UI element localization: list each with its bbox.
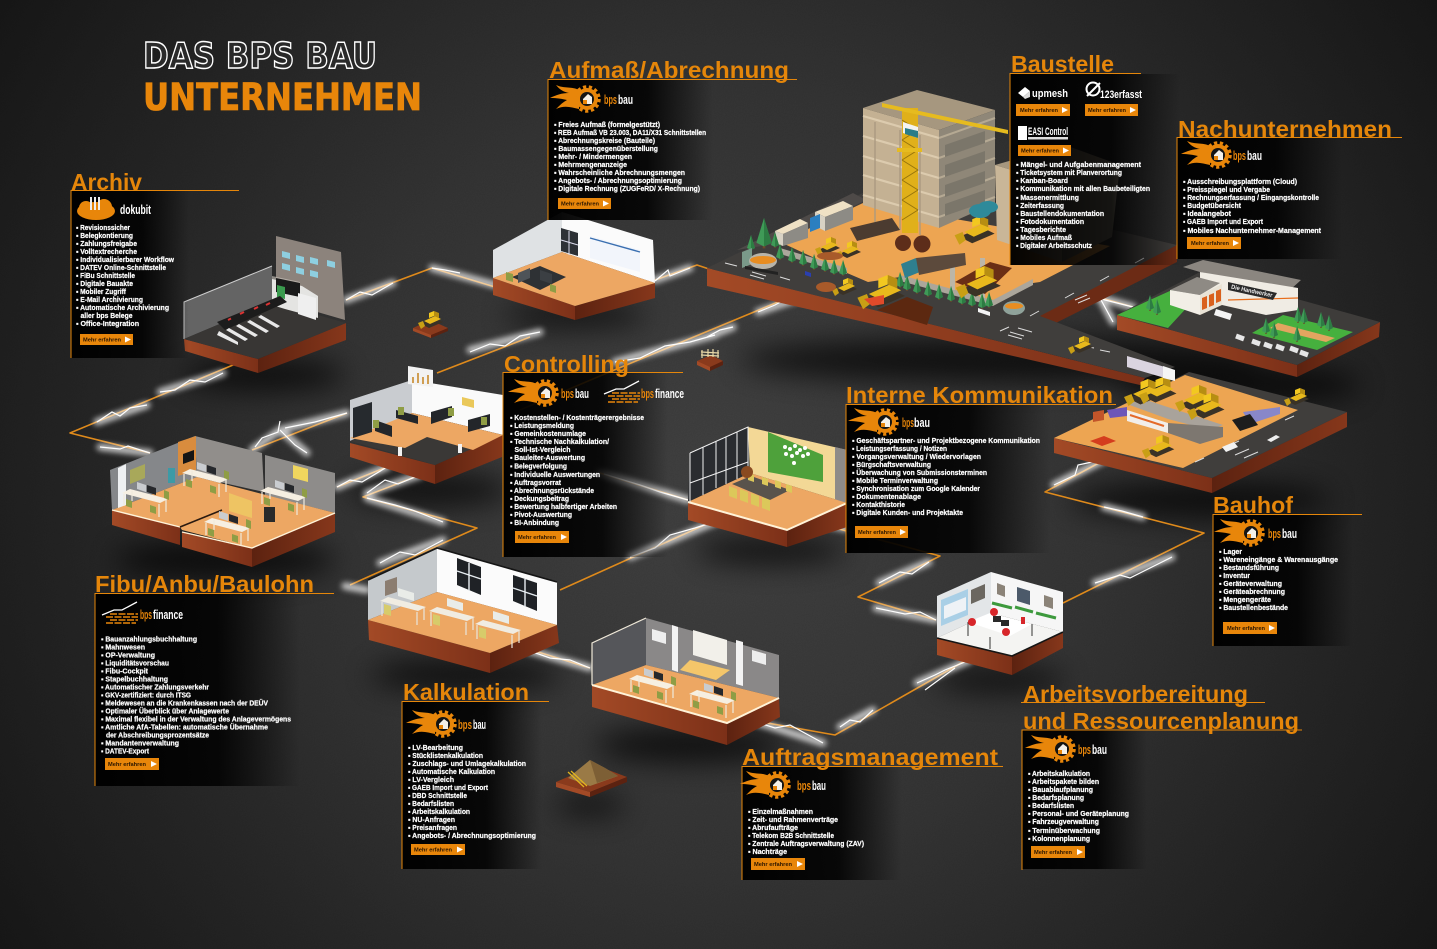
- feature list: ▪ Mobiler Zugriff: [76, 287, 127, 296]
- logo: bps finance: bps: [641, 386, 654, 401]
- floating dirt pile block: [556, 760, 627, 797]
- heading: Archiv: [71, 169, 142, 195]
- feature list: ▪ Zentrale Auftragsverwaltung (ZAV): [748, 839, 865, 848]
- logo: 123erfasst: 123erfasst: [1100, 89, 1142, 101]
- button: Mehr erfahren: [1191, 241, 1229, 247]
- feature list: ▪ BI-Anbindung: [510, 518, 559, 527]
- feature list: ▪ Mehr- / Mindermengen: [554, 152, 632, 161]
- button: [1187, 237, 1241, 249]
- feature list: ▪ Abrufaufträge: [748, 823, 798, 832]
- excavation pit: [877, 297, 933, 325]
- feature list: ▪ Massenermittlung: [1016, 193, 1079, 202]
- platform side right: [1005, 245, 1177, 342]
- button: [80, 334, 133, 345]
- feature list: ▪ Digitale Bauakte: [76, 279, 133, 288]
- yard machines: [1068, 336, 1309, 458]
- feature list: ▪ DBD Schnittstelle: [408, 791, 467, 800]
- feature list: ▪ Bürgschaftsverwaltung: [852, 460, 931, 469]
- button EASI Control: Mehr erfahren: [1021, 148, 1059, 154]
- scene: Baustelle construction site: [707, 90, 1177, 385]
- road markings: [725, 258, 1144, 352]
- feature list: ▪ Geräteabrechnung: [1219, 587, 1285, 596]
- feature list: ▪ Auftragsvorrat: [510, 478, 562, 487]
- logo: bps bau: [1181, 141, 1262, 167]
- scene: Aufmass room: [493, 212, 655, 320]
- logo: dokubit: dokubit: [120, 202, 151, 217]
- logo: EASI Control: EASI Control: [1028, 126, 1068, 138]
- connection lines: [70, 265, 1204, 735]
- feature list: [1016, 160, 1150, 250]
- feature list: ▪ Bedarfslisten: [1028, 801, 1074, 810]
- feature list: ▪ GAEB Import und Export: [1183, 217, 1264, 226]
- heading line one: Arbeitsvorbereitung: [1023, 681, 1248, 707]
- feature list: ▪ GKV-zertifiziert: durch ITSG: [101, 690, 191, 700]
- feature list: ▪ Stapelbuchhaltung: [101, 674, 168, 684]
- feature list: ▪ REB Aufmaß VB 23.003, DA11/X31 Schnittstellen: [554, 128, 706, 137]
- feature list: ▪ Tagesberichte: [1016, 225, 1066, 234]
- scene: Fibu offices: [110, 436, 335, 567]
- feature list: ▪ Wahrscheinliche Abrechnungsmengen: [554, 168, 685, 177]
- scene: Bauhof yard: [1054, 336, 1347, 493]
- scene: Auftragsmanagement room: [592, 618, 780, 745]
- feature list: ▪ Mobiles Aufmaß: [1016, 233, 1073, 242]
- logo: bps bau: [740, 771, 826, 797]
- heading: Auftragsmanagement: [742, 744, 998, 770]
- feature list: ▪ Mengengeräte: [1219, 595, 1271, 604]
- logo: bps bau: [848, 408, 930, 434]
- logo: bps finance: bps: [140, 607, 152, 622]
- feature list: Soll-Ist-Vergleich: [514, 445, 570, 454]
- feature list: ▪ Inventur: [1219, 571, 1250, 580]
- feature list: ▪ Digitale Kunden- und Projektakte: [852, 508, 963, 517]
- floating bulldozer block: [413, 311, 448, 338]
- feature list: [101, 634, 291, 756]
- button: Mehr erfahren: [858, 530, 896, 536]
- fences: [780, 248, 847, 274]
- scene: Arbeitsvorbereitung room: [937, 572, 1063, 675]
- feature list: ▪ Liquiditätsvorschau: [101, 658, 169, 668]
- feature list: ▪ Arbeitskalkulation: [408, 807, 470, 816]
- logo: bps bau: bps: [561, 386, 574, 401]
- title line two: UNTERNEHMEN: [143, 76, 422, 119]
- feature list: ▪ Preisspiegel und Vergabe: [1183, 185, 1270, 194]
- feature list: ▪ Fibu-Cockpit: [101, 666, 149, 676]
- scene: Nachunternehmer platform: [1117, 260, 1380, 377]
- trees and parked cars: [1146, 295, 1333, 355]
- logo: bps bau: bps: [1268, 526, 1281, 541]
- lightning glow: [97, 268, 1172, 743]
- heading: Bauhof: [1213, 492, 1293, 518]
- feature list: ▪ Baustellenbestände: [1219, 603, 1288, 612]
- feature list: ▪ Baustellendokumentation: [1016, 209, 1104, 218]
- panel: Baustelle: [1010, 51, 1180, 265]
- panel: Aufmass/Abrechnung: [548, 57, 797, 220]
- button: [411, 844, 465, 855]
- feature list: ▪ Abrechnungskreise (Bauteile): [554, 136, 656, 145]
- logo: bps finance: [102, 602, 183, 623]
- heading: Nachunternehmen: [1178, 116, 1392, 142]
- panel: Bauhof: [1213, 492, 1362, 646]
- feature list: ▪ Bedarfslisten: [408, 799, 454, 808]
- feature list: ▪ Mobile Terminverwaltung: [852, 476, 938, 485]
- feature list: ▪ Mahnwesen: [101, 642, 145, 652]
- panel: Archiv: [71, 169, 239, 358]
- building main: [863, 90, 995, 130]
- logo: bps bau: bps: [1233, 148, 1246, 163]
- panel: Controlling: [503, 351, 684, 557]
- feature list: ▪ Bestandsführung: [1219, 563, 1279, 572]
- feature list: [510, 413, 644, 527]
- feature list: ▪ Arbeitskalkulation: [1028, 769, 1090, 778]
- scene: Kalkulation room: [368, 548, 559, 673]
- site containers: [775, 219, 808, 234]
- heading: Controlling: [504, 351, 629, 377]
- feature list: ▪ Bedarfsplanung: [1028, 793, 1084, 802]
- feature list: ▪ E-Mail Archivierung: [76, 295, 143, 304]
- feature list: ▪ Bauanzahlungsbuchhaltung: [101, 634, 197, 644]
- feature list: ▪ Kanban-Board: [1016, 176, 1068, 185]
- heading: Fibu/Anbu/Baulohn: [95, 571, 314, 597]
- feature list: ▪ Synchronisation zum Google Kalender: [852, 484, 980, 493]
- panel: Fibu/Anbu/Baulohn: [95, 571, 334, 786]
- feature list: ▪ Volltextrecherche: [76, 247, 137, 256]
- feature list: ▪ Automatischer Zahlungsverkehr: [101, 682, 209, 692]
- back strip: [737, 193, 866, 250]
- feature list: ▪ Bewertung halbfertiger Arbeiten: [510, 502, 617, 511]
- feature list: aller bps Belege: [80, 311, 132, 320]
- feature list: ▪ Geräteverwaltung: [1219, 579, 1282, 588]
- feature list: ▪ LV-Vergleich: [408, 775, 454, 784]
- vehicles: [742, 201, 1025, 316]
- button: Mehr erfahren: [754, 862, 792, 868]
- logo: EASI Control: [1018, 126, 1068, 140]
- feature list: ▪ NU-Anfragen: [408, 815, 455, 824]
- scene: Archiv platform: [184, 236, 346, 373]
- cable drums and pipes: [895, 235, 911, 251]
- lightning bolts: [97, 268, 1172, 743]
- feature list: ▪ Leistungsmeldung: [510, 421, 574, 430]
- logo: bps bau: bps: [797, 778, 811, 793]
- feature list: ▪ Abrechnungsrückstände: [510, 486, 594, 495]
- panel: Interne Kommunikation: [846, 382, 1116, 553]
- logo: upmesh: upmesh: [1032, 88, 1068, 100]
- logo: bps bau: bau: [618, 92, 633, 107]
- feature list: ▪ Bauleiter-Auswertung: [510, 453, 585, 462]
- feature list: ▪ Mobiles Nachunternehmer-Management: [1183, 226, 1322, 235]
- button: [105, 758, 159, 770]
- feature list: ▪ Optimaler Überblick über Anlagewerte: [101, 706, 229, 716]
- button: Mehr erfahren: [518, 535, 556, 541]
- feature list: ▪ Einzelmaßnahmen: [748, 807, 813, 816]
- button: [558, 198, 611, 209]
- logo: bps bau: bau: [914, 415, 930, 430]
- heading: Interne Kommunikation: [846, 382, 1113, 408]
- feature list: der Abschreibungsprozentsätze: [106, 730, 209, 740]
- title: [143, 36, 422, 119]
- building second block: [995, 145, 1120, 185]
- feature list: ▪ Leistungserfassung / Notizen: [852, 444, 947, 453]
- feature list: ▪ Revisionssicher: [76, 223, 130, 232]
- feature list: ▪ Kostenstellen- / Kostenträgerergebnisse: [510, 413, 644, 422]
- feature list: ▪ Digitale Rechnung (ZUGFeRD/ X-Rechnung): [554, 184, 701, 193]
- button: Mehr erfahren: [1227, 626, 1265, 632]
- panel: Kalkulation: [402, 679, 549, 869]
- feature list: ▪ Digitaler Arbeitsschutz: [1016, 241, 1092, 250]
- button: Mehr erfahren: [108, 762, 146, 768]
- feature list: ▪ LV-Bearbeitung: [408, 743, 463, 752]
- logo: bps bau: bps: [1078, 742, 1091, 757]
- logo: bps bau: bps: [604, 92, 617, 107]
- heading: Aufmaß/Abrechnung: [549, 57, 789, 83]
- feature list: ▪ Wareneingänge & Warenausgänge: [1219, 555, 1338, 564]
- feature list: ▪ Ticketsystem mit Planverortung: [1016, 168, 1122, 177]
- feature list: [408, 743, 536, 840]
- panel: Arbeitsvorbereitung und Ressourcenplanung: [1021, 681, 1302, 870]
- button: Mehr erfahren: [414, 848, 452, 854]
- scene: Controlling office: [350, 366, 503, 484]
- feature list: ▪ Technische Nachkalkulation/: [510, 437, 609, 446]
- button: [515, 531, 569, 543]
- sign text: Die Handwerker: [1230, 285, 1273, 299]
- feature list: ▪ Dokumentenablage: [852, 492, 921, 501]
- button upmesh: Mehr erfahren: [1020, 108, 1058, 114]
- site ground: [780, 203, 1110, 303]
- button 123erfasst: Mehr erfahren: [1088, 108, 1126, 114]
- feature list: ▪ Stücklistenkalkulation: [408, 751, 483, 760]
- road surface: [707, 178, 1177, 378]
- button: [855, 526, 908, 538]
- feature list: ▪ Angebots- / Abrechnungsoptimierung: [408, 831, 536, 840]
- feature list: ▪ Geschäftspartner- und Projektbezogene Kommunikation: [852, 436, 1040, 445]
- feature list: ▪ Belegverfolgung: [510, 462, 567, 470]
- heading: Kalkulation: [403, 679, 529, 705]
- feature list: ▪ Telekom B2B Schnittstelle: [748, 831, 834, 840]
- feature list: [1219, 547, 1338, 612]
- feature list: [852, 436, 1040, 517]
- logo: bps bau: bps: [902, 415, 914, 430]
- logo: 123erfasst: [1086, 82, 1142, 101]
- platform drop shadows: [115, 303, 1360, 815]
- feature list: ▪ FiBu Schnittstelle: [76, 271, 135, 280]
- feature list: ▪ Gemeinkostenumlage: [510, 429, 586, 438]
- feature list: ▪ Mehrmengenanzeige: [554, 160, 627, 169]
- feature list: ▪ Zeiterfassung: [1016, 201, 1064, 210]
- feature list: ▪ Office-Integration: [76, 319, 139, 328]
- trees: [747, 218, 993, 309]
- feature list: ▪ Individuelle Auswertungen: [510, 470, 600, 479]
- feature list: ▪ Terminüberwachung: [1028, 826, 1100, 835]
- heading line two: und Ressourcenplanung: [1023, 708, 1299, 734]
- feature list: ▪ Mandantenverwaltung: [101, 738, 179, 748]
- logo: dokubit: [77, 197, 151, 220]
- logo: bps bau: bau: [575, 386, 589, 401]
- feature list: [1183, 177, 1322, 235]
- feature list: ▪ Ausschreibungsplattform (Cloud): [1183, 177, 1298, 186]
- logo: bps bau: bau: [1092, 742, 1107, 757]
- feature list: [76, 223, 174, 328]
- feature list: ▪ Zahlungsfreigabe: [76, 239, 137, 248]
- title line one: DAS BPS BAU: [143, 36, 377, 77]
- button: Mehr erfahren: [561, 202, 599, 208]
- scene: conference room: [688, 427, 847, 547]
- feature list: ▪ Pivot-Auswertung: [510, 510, 572, 519]
- feature list: [748, 807, 865, 856]
- logo: bps bau: bau: [812, 778, 826, 793]
- button: Mehr erfahren: [1034, 850, 1072, 856]
- logo: bps finance: [604, 381, 684, 402]
- feature list: ▪ Kontakthistorie: [852, 500, 905, 509]
- button: [1223, 622, 1277, 634]
- heading: Baustelle: [1011, 51, 1114, 77]
- feature list: ▪ Maximal flexibel in der Verwaltung des Anlagevermögens: [101, 714, 291, 724]
- feature list: ▪ Deckungsbeitrag: [510, 494, 569, 503]
- logo: bps finance: finance: [655, 386, 684, 401]
- feature list: ▪ GAEB Import und Export: [408, 783, 489, 792]
- floating fence block: [697, 349, 723, 371]
- feature list: ▪ Zeit- und Rahmenverträge: [748, 815, 838, 824]
- feature list: ▪ Baumassengegenüberstellung: [554, 144, 658, 153]
- feature list: ▪ Nachträge: [748, 847, 787, 856]
- logo: bps bau: [1214, 519, 1297, 545]
- panel: Nachunternehmen: [1177, 116, 1402, 259]
- feature list: ▪ Lager: [1219, 547, 1242, 556]
- button upmesh: [1016, 104, 1070, 116]
- button 123erfasst: [1085, 104, 1138, 116]
- feature list: ▪ OP-Verwaltung: [101, 650, 155, 660]
- logo: bps bau: [1025, 735, 1107, 761]
- feature list: [554, 120, 706, 193]
- logo: bps bau: [550, 85, 633, 111]
- feature list: ▪ DATEV-Export: [101, 746, 150, 756]
- feature list: ▪ Meldewesen an die Krankenkassen nach der DEÜV: [101, 698, 268, 708]
- logo: bps bau: [508, 379, 589, 405]
- feature list: ▪ Preisanfragen: [408, 823, 457, 832]
- logo: bps bau: bau: [473, 717, 486, 732]
- feature list: ▪ Budgetübersicht: [1183, 201, 1242, 210]
- logo: upmesh: [1018, 87, 1068, 100]
- logo: bps finance: finance: [153, 607, 183, 622]
- logo: bps bau: bau: [1282, 526, 1297, 541]
- feature list: ▪ Individualisierbarer Workflow: [76, 255, 174, 264]
- button: [751, 858, 805, 870]
- crane: [882, 103, 1008, 233]
- feature list: ▪ Fotodokumentation: [1016, 217, 1084, 226]
- button EASI Control: [1018, 145, 1071, 156]
- panel: Auftragsmanagement: [740, 744, 1003, 880]
- feature list: ▪ Mängel- und Aufgabenmanagement: [1016, 160, 1142, 169]
- feature list: ▪ Fahrzeugverwaltung: [1028, 817, 1099, 826]
- feature list: ▪ Überwachung von Submissionsterminen: [852, 468, 987, 477]
- feature list: ▪ Zuschlags- und Umlagekalkulation: [408, 759, 526, 768]
- button: [1031, 846, 1085, 858]
- feature list: ▪ DATEV Online-Schnittstelle: [76, 263, 166, 272]
- feature list: ▪ Kolonnenplanung: [1028, 834, 1090, 843]
- feature list: [1028, 769, 1129, 843]
- feature list: ▪ Personal- und Geräteplanung: [1028, 809, 1129, 818]
- feature list: ▪ Freies Aufmaß (formelgestützt): [554, 120, 661, 129]
- feature list: ▪ Amtliche AfA-Tabellen: automatische Übernahme: [101, 722, 268, 732]
- platform base: [707, 268, 1145, 385]
- feature list: ▪ Bauablaufplanung: [1028, 785, 1093, 794]
- feature list: ▪ Rechnungserfassung / Eingangskontrolle: [1183, 193, 1319, 202]
- feature list: ▪ Automatische Archivierung: [76, 303, 169, 312]
- feature list: ▪ Angebots- / Abrechnungsoptimierung: [554, 176, 682, 185]
- feature list: ▪ Kommunikation mit allen Baubeteiligten: [1016, 184, 1150, 193]
- logo: bps bau: [406, 710, 486, 736]
- feature list: ▪ Vorgangsverwaltung / Wiedervorlagen: [852, 452, 981, 461]
- feature list: ▪ Arbeitspakete bilden: [1028, 777, 1099, 786]
- logo: bps bau: bau: [1247, 148, 1262, 163]
- logo: bps bau: bps: [458, 717, 472, 732]
- feature list: ▪ Belegkontierung: [76, 231, 133, 240]
- button: Mehr erfahren: [83, 338, 121, 344]
- feature list: ▪ Automatische Kalkulation: [408, 767, 495, 776]
- feature list: ▪ Idealangebot: [1183, 209, 1232, 218]
